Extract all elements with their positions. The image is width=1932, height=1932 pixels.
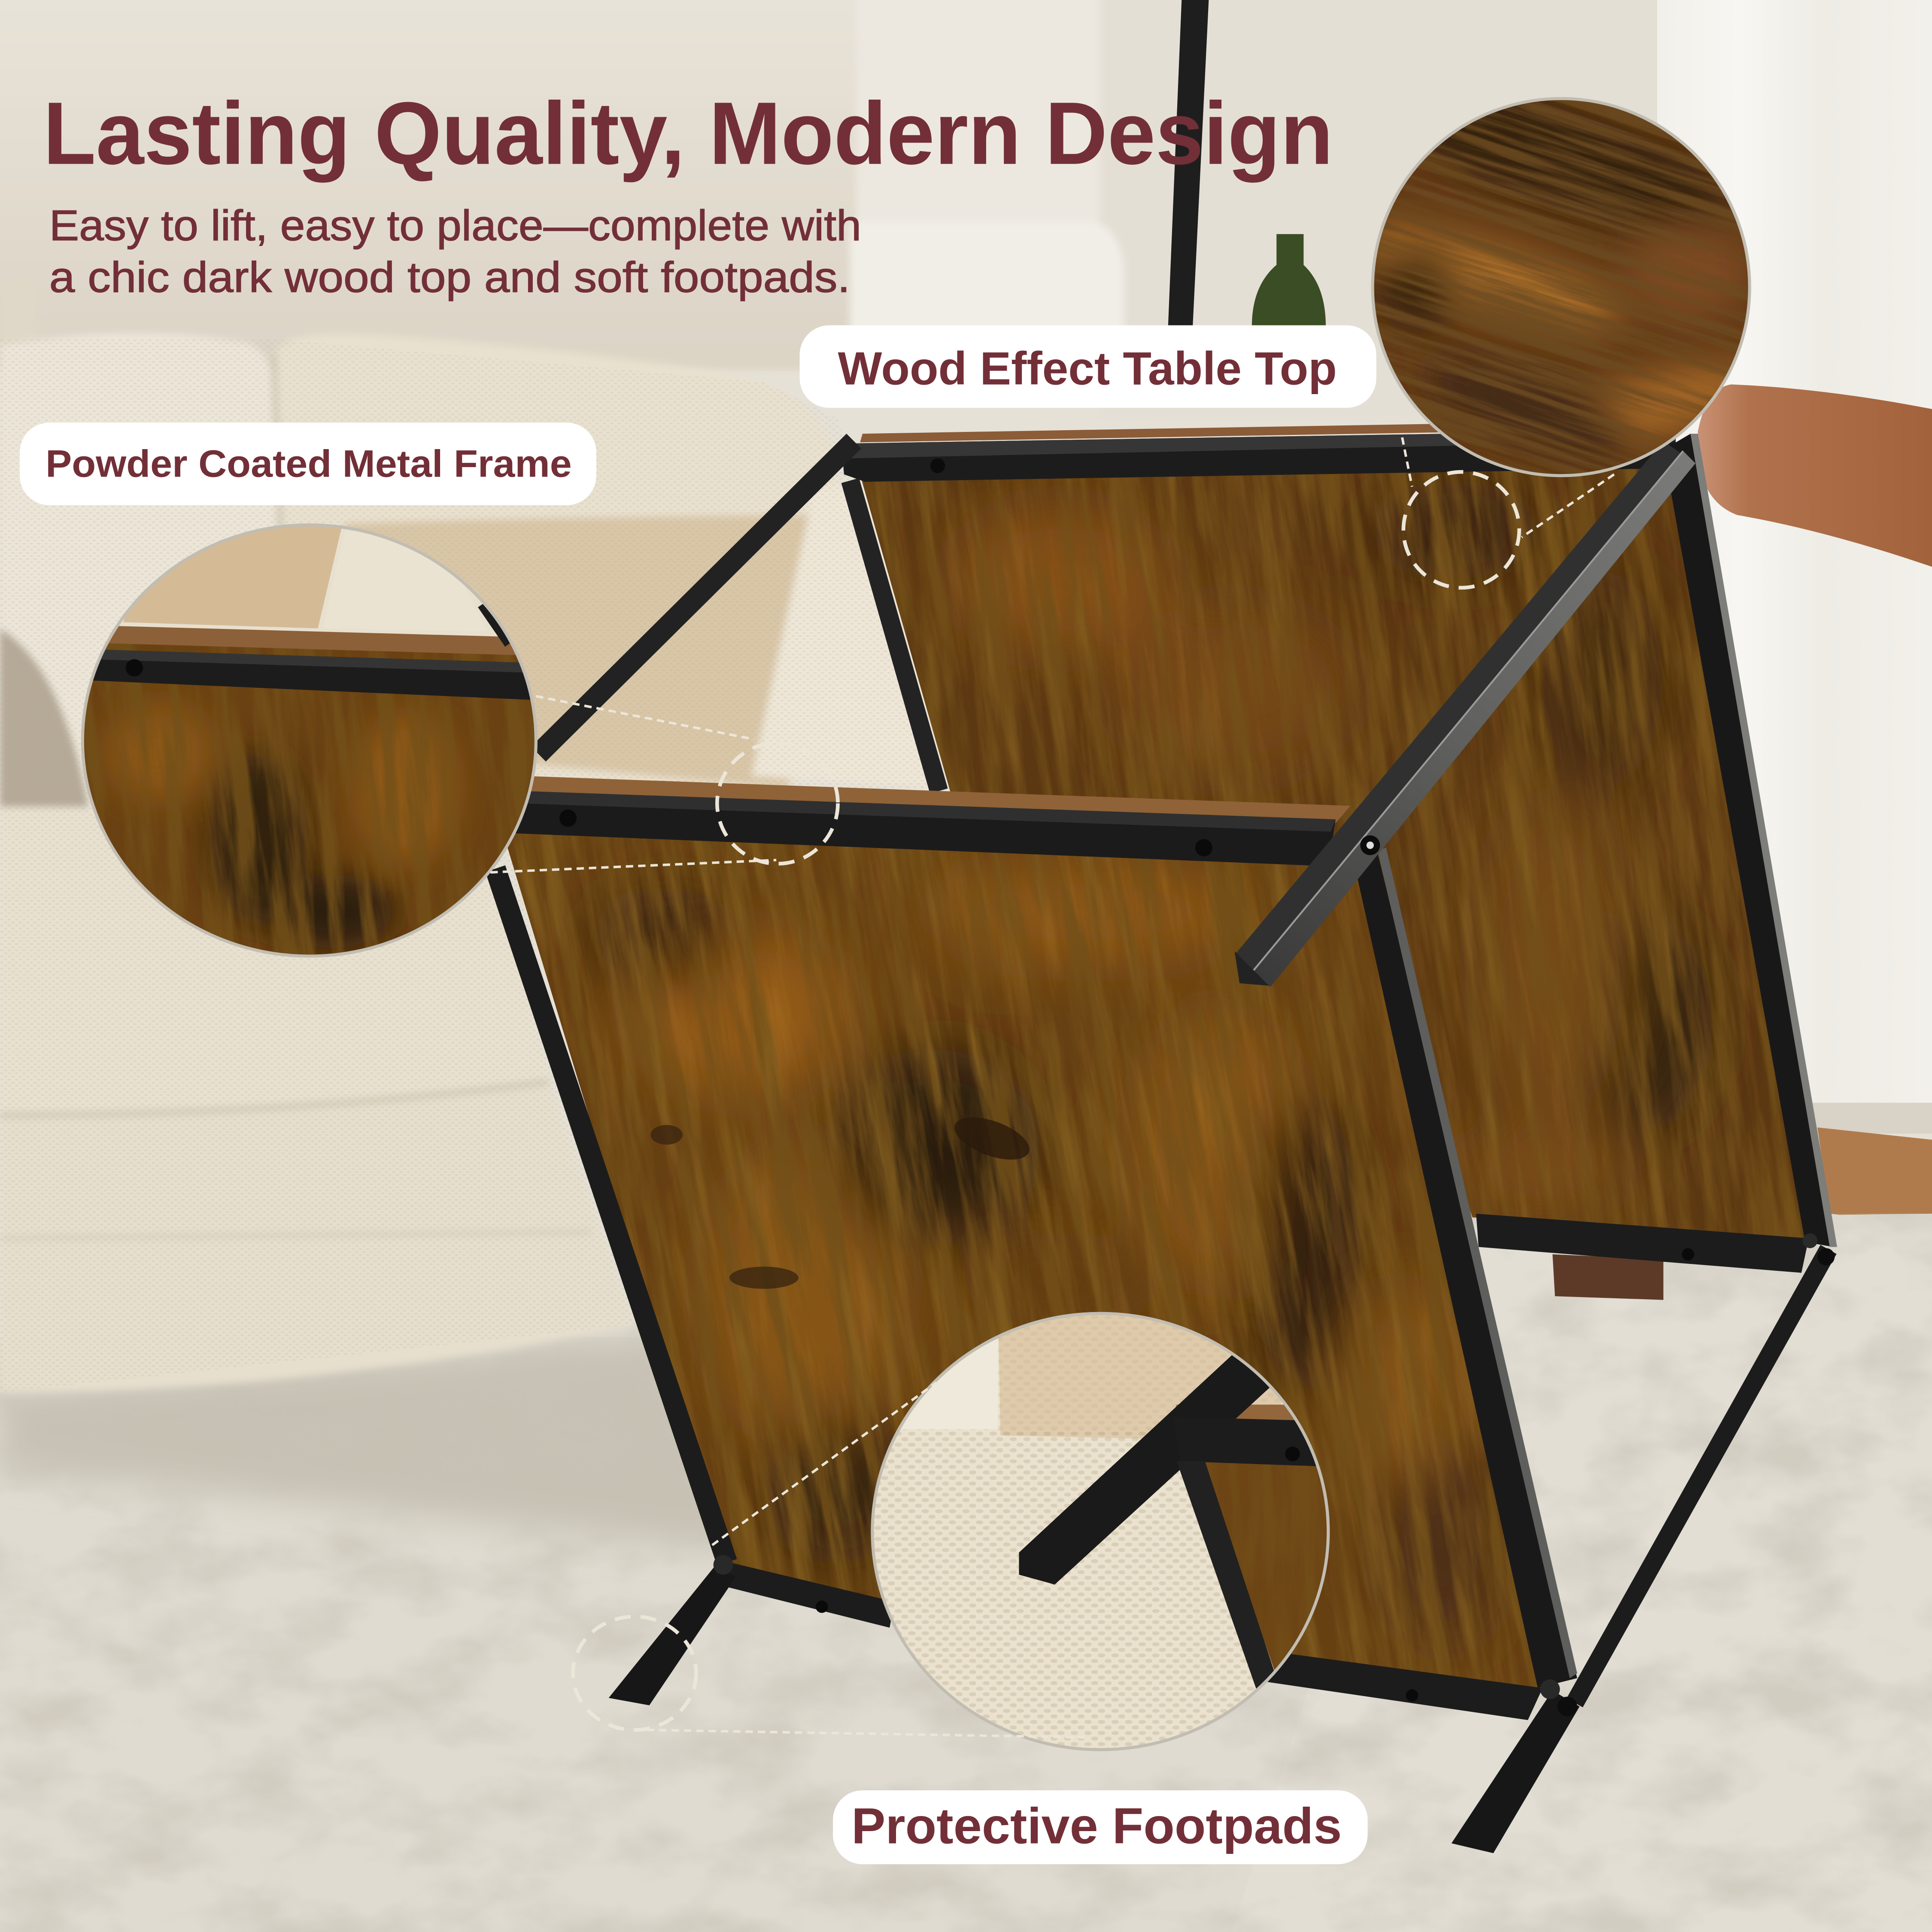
inset shelf bar: [1173, 1417, 1318, 1466]
label: wood effect table top: [800, 325, 1376, 408]
label: protective footpads: Protective Footpads: [851, 1797, 1342, 1854]
front wood panel: [213, 574, 1813, 1914]
rear left diagonal: [538, 441, 854, 754]
rear left post: [850, 480, 939, 791]
wood seen in the inset: [1201, 1460, 1331, 1691]
label: powder coated metal frame: Powder Coated Metal Frame: [46, 442, 572, 485]
front left post: [495, 869, 727, 1562]
table front frame: [495, 441, 1835, 1853]
diagonal bar with metallic highlight: [1235, 441, 1695, 987]
rear top bar: [841, 430, 1676, 482]
front right post: [1355, 853, 1577, 1688]
label: protective footpads: [833, 1790, 1368, 1864]
rear right post: [1663, 434, 1833, 1247]
right foot leg: [1452, 1691, 1580, 1853]
inset circle: metal frame detail: [7, 517, 635, 1027]
label: powder coated metal frame: [20, 422, 596, 505]
inset circle: footpad detail: [863, 1306, 1343, 1762]
dashed callout: metal frame: [490, 696, 838, 872]
rear wood top strip: [860, 420, 1651, 442]
black floor lamp pole: [1168, 0, 1209, 327]
rear bottom bar: [1476, 1214, 1809, 1273]
dashed callout: wood top: [1402, 437, 1614, 588]
rug: [0, 1337, 1932, 1932]
table rear frame: [538, 420, 1837, 1703]
front bottom bar left: [727, 1562, 895, 1628]
title: Lasting Quality, Modern Design: [43, 84, 1333, 183]
curtains: [1657, 0, 1932, 1109]
subtitle: [49, 202, 861, 301]
dashed callout: footpad: [573, 1382, 1084, 1738]
wood floor: [1817, 1127, 1932, 1226]
inset black leg: [1019, 1349, 1275, 1585]
front top bar: [505, 791, 1336, 866]
left foot leg: [609, 1565, 735, 1705]
subtitle: a chic dark wood top and soft footpads.: [49, 253, 850, 301]
inset post: [1177, 1461, 1276, 1691]
label: wood effect table top: Wood Effect Table Top: [838, 342, 1337, 395]
sofa: [0, 333, 949, 1392]
inset circle: wood top detail: [1212, 0, 1915, 630]
sofa leg: [1552, 1255, 1663, 1300]
long rear leg: [1575, 1249, 1829, 1703]
hand holding the table: [1698, 384, 1932, 567]
subtitle: Easy to lift, easy to place—complete with: [49, 202, 861, 250]
green bottle: [1252, 234, 1326, 327]
front bottom bar right: [1267, 1651, 1543, 1720]
back wood panel: [620, 238, 1932, 1508]
front wood top strip: [525, 776, 1350, 823]
